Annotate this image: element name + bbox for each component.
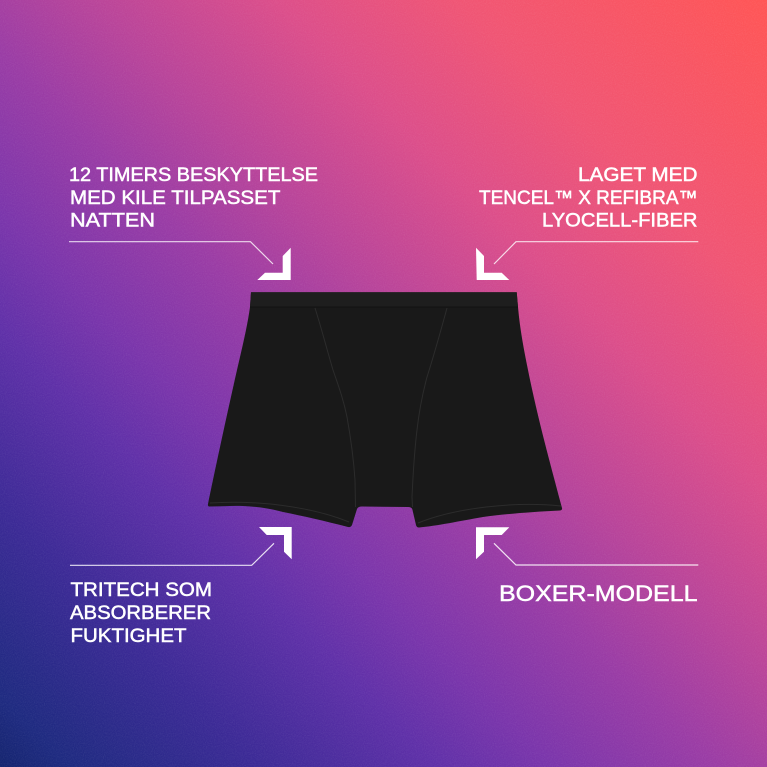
text: tritech: ABSORBERER <box>70 603 211 624</box>
text: laget med tencel: TENCEL™ X REFIBRA™ <box>479 188 698 209</box>
leader line <box>69 242 273 264</box>
arrow corner <box>476 527 509 559</box>
callout: bottom left <box>70 527 292 647</box>
seams <box>210 308 561 523</box>
text: 12 timers beskyttelse: NATTEN <box>70 210 155 232</box>
leader line <box>70 543 274 565</box>
text: tritech: TRITECH SOM <box>70 580 212 601</box>
arrow corner <box>476 248 509 280</box>
arrow corner <box>259 527 292 559</box>
waistband stitching <box>250 306 518 308</box>
text: boxer-modell: BOXER-MODELL <box>499 581 698 606</box>
text: laget med tencel: LAGET MED <box>578 165 698 186</box>
text: 12 timers beskyttelse: MED KILE TILPASSET <box>70 188 281 209</box>
leader line <box>494 543 698 565</box>
text: tritech: FUKTIGHET <box>70 626 187 647</box>
garment body <box>208 292 562 528</box>
text: laget med tencel: LYOCELL-FIBER <box>542 210 698 232</box>
callout: bottom right <box>476 527 698 606</box>
arrow corner <box>257 248 291 280</box>
callout: top right <box>476 165 703 280</box>
text: 12 timers beskyttelse: 12 TIMERS BESKYTTELSE <box>69 165 318 186</box>
callout: top left <box>69 165 323 280</box>
leader line <box>494 242 698 264</box>
product: black boxer briefs <box>208 292 562 528</box>
waistband <box>250 292 518 307</box>
